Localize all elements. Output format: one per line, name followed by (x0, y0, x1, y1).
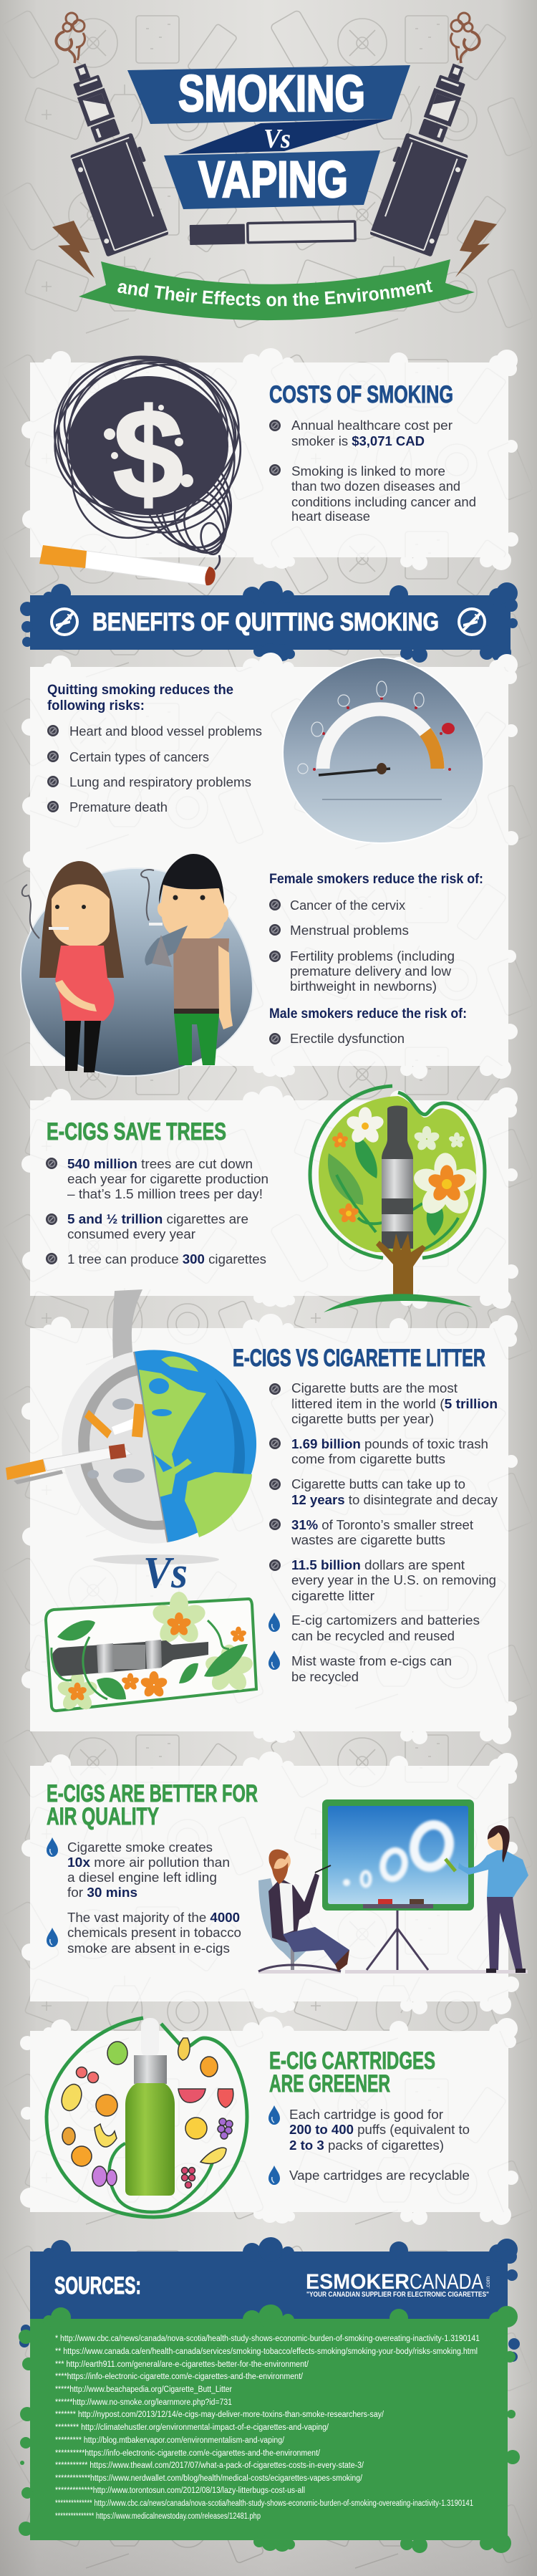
text: source links: ************https://www.nerdwallet.com/blog/health/medical-costs/ecigarettes-vapes-smoking/ (55, 2474, 363, 2483)
heading: costs of smoking: COSTS OF SMOKING (269, 381, 453, 408)
icon: smoke scribble with dollar (32, 326, 268, 569)
text: female smokers: Menstrual problems (290, 923, 409, 938)
list: cartridge facts: 2 to 3 packs of cigarettes) (289, 2138, 444, 2153)
vs mark: Vs (143, 1549, 188, 1597)
list: air facts: The vast majority of the 4000 (67, 1910, 240, 1925)
list: air facts: Cigarette smoke creates (67, 1840, 213, 1855)
text: female smokers: Female smokers reduce the risk of: (269, 872, 483, 887)
list: smoking costs: conditions including cancer and (291, 494, 476, 509)
list: litter facts: cigarette litter (291, 1588, 374, 1603)
logo: esmoker canada: CANADA (410, 2270, 483, 2294)
heading: cartridges: ARE GREENER (269, 2070, 390, 2097)
list: risks: Heart and blood vessel problems (69, 724, 262, 739)
hero title block (52, 11, 497, 321)
list: litter facts: littered item in the world ( 5 trillion (291, 1396, 498, 1411)
list: litter facts: Mist waste from e-cigs can (291, 1653, 452, 1668)
list: risks (47, 724, 262, 814)
text: source links: ****https://info-electronic-cigarette.com/e-cigarettes-and-the-environment/ (55, 2373, 304, 2381)
list: litter facts: Cigarette butts can take up to (291, 1476, 465, 1491)
list: smoking costs: Annual healthcare cost per (291, 418, 453, 433)
icon: e-cigarette (190, 221, 355, 245)
text: female smokers: premature delivery and low (290, 963, 452, 979)
icon: left lightning bolt (52, 221, 95, 278)
text: source links: *****http://www.beachapedia.org/Cigarette_Butt_Litter (55, 2385, 232, 2394)
list: air facts: 10x more air pollution than (67, 1855, 230, 1870)
heading: cartridges (269, 2047, 435, 2097)
text: source links: ********* http://blog.mtbakervapor.com/environmentalism-and-vaping/ (55, 2436, 285, 2445)
logo: esmoker canada: ESMOKER (306, 2270, 410, 2294)
text: source links (55, 2335, 480, 2521)
heading: benefits: BENEFITS OF QUITTING SMOKING (92, 608, 439, 636)
subtitle ribbon: and Their Effects on the Environment (117, 279, 432, 307)
panel: benefits of quitting (21, 653, 518, 1079)
illustration: seated man (258, 1850, 349, 1971)
list: air facts: smoke are absent in e-cigs (67, 1941, 230, 1956)
list: smoking costs: smoker is $3,071 CAD (291, 433, 425, 448)
title banner: vaping: VAPING (198, 152, 348, 208)
panel: costs of smoking (21, 326, 518, 585)
illustration: standing woman (445, 1825, 528, 1973)
list: litter facts: E-cig cartomizers and batteries (291, 1613, 480, 1628)
text: source links: ******http://www.no-smoke.org/learnmore.php?id=731 (55, 2398, 232, 2407)
list: litter facts: cigarette butts per year) (291, 1411, 434, 1426)
list: trees facts: each year for cigarette production (67, 1171, 268, 1186)
list: trees facts: 540 million trees are cut down (67, 1156, 253, 1171)
list: litter facts (268, 1380, 498, 1684)
list: air facts: for 30 mins (67, 1885, 137, 1900)
list: trees facts: – that’s 1.5 million trees per day! (67, 1186, 263, 1201)
icon: burning cigarette (39, 545, 216, 585)
list: smoking costs: heart disease (291, 509, 370, 524)
title connector: vs: Vs (263, 124, 291, 154)
illustration: pregnant woman and man smoking (21, 854, 253, 1076)
icon: no smoking left (52, 609, 77, 635)
panel: sources (19, 2237, 520, 2553)
title banner: smoking: SMOKING (178, 66, 365, 122)
icon: right vape mod with smoke (366, 13, 496, 257)
list: risks: Certain types of cancers (69, 749, 209, 764)
text: source links: *************** https://www.medicalnewstoday.com/releases/12481.php (55, 2512, 261, 2521)
logo: esmoker canada: .com (485, 2276, 491, 2289)
list: litter facts: Cigarette butts are the most (291, 1380, 458, 1395)
icon: globe and ashtray (6, 1289, 256, 1544)
list: risks: Lung and respiratory problems (69, 774, 251, 789)
list: air facts (47, 1837, 241, 1956)
list: litter facts: can be recycled and reused (291, 1628, 455, 1643)
illustration: presentation board (258, 1799, 528, 1974)
panel: e-cigs save trees (21, 1086, 518, 1309)
shadow below ashtray (93, 1554, 219, 1565)
heading: e-cigs save trees: E-CIGS SAVE TREES (47, 1118, 226, 1145)
list: trees facts: consumed every year (67, 1226, 195, 1241)
text: source links: * http://www.cbc.ca/news/canada/nova-scotia/health-study-shows-economic-burden-of-smoking-overeating-inactivity-1.3190141 (55, 2335, 480, 2343)
text: risks intro: Quitting smoking reduces the (47, 683, 233, 698)
list: smoking costs (269, 418, 476, 524)
list: litter facts: 1.69 billion pounds of toxic trash (291, 1436, 488, 1451)
logo: esmoker canada: "YOUR CANADIAN SUPPLIER FOR ELECTRONIC CIGARETTES" (306, 2291, 489, 2299)
illustration: e-liquid bottle and fruit (47, 2018, 247, 2217)
list: trees facts (46, 1156, 268, 1267)
list: cartridge facts: Vape cartridges are recyclable (289, 2168, 470, 2183)
text: female smokers: birthweight in newborns) (290, 979, 437, 994)
list: cartridge facts: Each cartridge is good for (289, 2107, 443, 2122)
sources header band (19, 2237, 520, 2362)
text: risks intro: following risks: (47, 698, 145, 713)
text: female smokers: Cancer of the cervix (290, 898, 406, 913)
heading: air quality: AIR QUALITY (47, 1803, 159, 1830)
text: source links: ** https://www.canada.ca/en/health-canada/services/smoking-tobacco/effects-smoking/smoking-your-body/risks-smoking.html (55, 2347, 478, 2356)
subtitle ribbon (79, 259, 475, 321)
text: source links: *********** https://www.theawl.com/2017/07/what-a-pack-of-cigarettes-costs-in-every-state-3/ (55, 2461, 364, 2470)
panel: air quality (21, 1751, 528, 2014)
list: trees facts: 5 and ½ trillion cigarettes are (67, 1211, 248, 1226)
text: male smokers: Erectile dysfunction (290, 1031, 405, 1046)
text: source links: **********https://info-electronic-cigarette.com/e-cigarettes-and-the-environment/ (55, 2449, 321, 2458)
list: air facts: a diesel engine left idling (67, 1870, 217, 1885)
panel: e-cigs vs cigarette litter (6, 1289, 518, 1744)
icon: smoke scribble with dollar: $ (113, 383, 183, 525)
list: risks: Premature death (69, 799, 168, 814)
heading: air quality: E-CIGS ARE BETTER FOR (47, 1780, 258, 1807)
list: litter facts: be recycled (291, 1669, 359, 1684)
text: male smokers (269, 1006, 467, 1046)
text: risks intro (47, 683, 233, 713)
decorative grass under tree (324, 1294, 473, 1312)
illustration: e-cig tree (310, 1086, 485, 1295)
heading: cartridges: E-CIG CARTRIDGES (269, 2047, 435, 2075)
list: litter facts: 31% of Toronto’s smaller street (291, 1517, 473, 1532)
list: cartridge facts (268, 2105, 470, 2185)
illustration: e-cig in flower card (46, 1592, 256, 1713)
icon: left vape mod with smoke (42, 13, 173, 257)
list: litter facts: 12 years to disintegrate and decay (291, 1492, 498, 1507)
list: litter facts: wastes are cigarette butts (291, 1532, 445, 1547)
text: source links: ******** http://climatehustler.org/environmental-impact-of-e-cigarettes-and-vaping/ (55, 2423, 329, 2432)
logo: esmoker canada (306, 2270, 491, 2299)
text: female smokers (269, 872, 483, 994)
text: source links: ******* http://nypost.com/2013/12/14/e-cigs-may-deliver-more-toxins-than-smoke-researchers-say/ (55, 2411, 384, 2419)
list: litter facts: 11.5 billion dollars are spent (291, 1557, 465, 1572)
text: male smokers: Male smokers reduce the risk of: (269, 1006, 467, 1022)
icon: no smoking right (459, 609, 485, 635)
list: air facts: chemicals present in tobacco (67, 1925, 241, 1940)
list: litter facts: come from cigarette butts (291, 1451, 445, 1466)
heading: sources: SOURCES: (54, 2272, 141, 2299)
icon: right lightning bolt (455, 220, 497, 277)
sources list panel (19, 2305, 520, 2553)
list: smoking costs: Smoking is linked to more (291, 463, 445, 479)
list: smoking costs: than two dozen diseases and (291, 479, 460, 494)
heading: air quality (47, 1780, 258, 1830)
title banner: smoking (127, 65, 410, 154)
banner: benefits of quitting smoking (20, 581, 518, 663)
text: source links: *************http://www.torontosun.com/2012/08/13/lazy-litterbugs-cost-us-all (55, 2486, 305, 2495)
list: litter facts: every year in the U.S. on removing (291, 1572, 496, 1587)
gauge: cigarette meter (283, 658, 483, 843)
text: source links: *** http://earth911.com/general/are-e-cigarettes-better-for-the-environment/ (55, 2360, 309, 2369)
list: cartridge facts: 200 to 400 puffs (equivalent to (289, 2122, 470, 2137)
text: female smokers: Fertility problems (including (290, 948, 455, 963)
list: trees facts: 1 tree can produce 300 cigarettes (67, 1251, 266, 1267)
panel: cartridges are greener (20, 2017, 518, 2225)
